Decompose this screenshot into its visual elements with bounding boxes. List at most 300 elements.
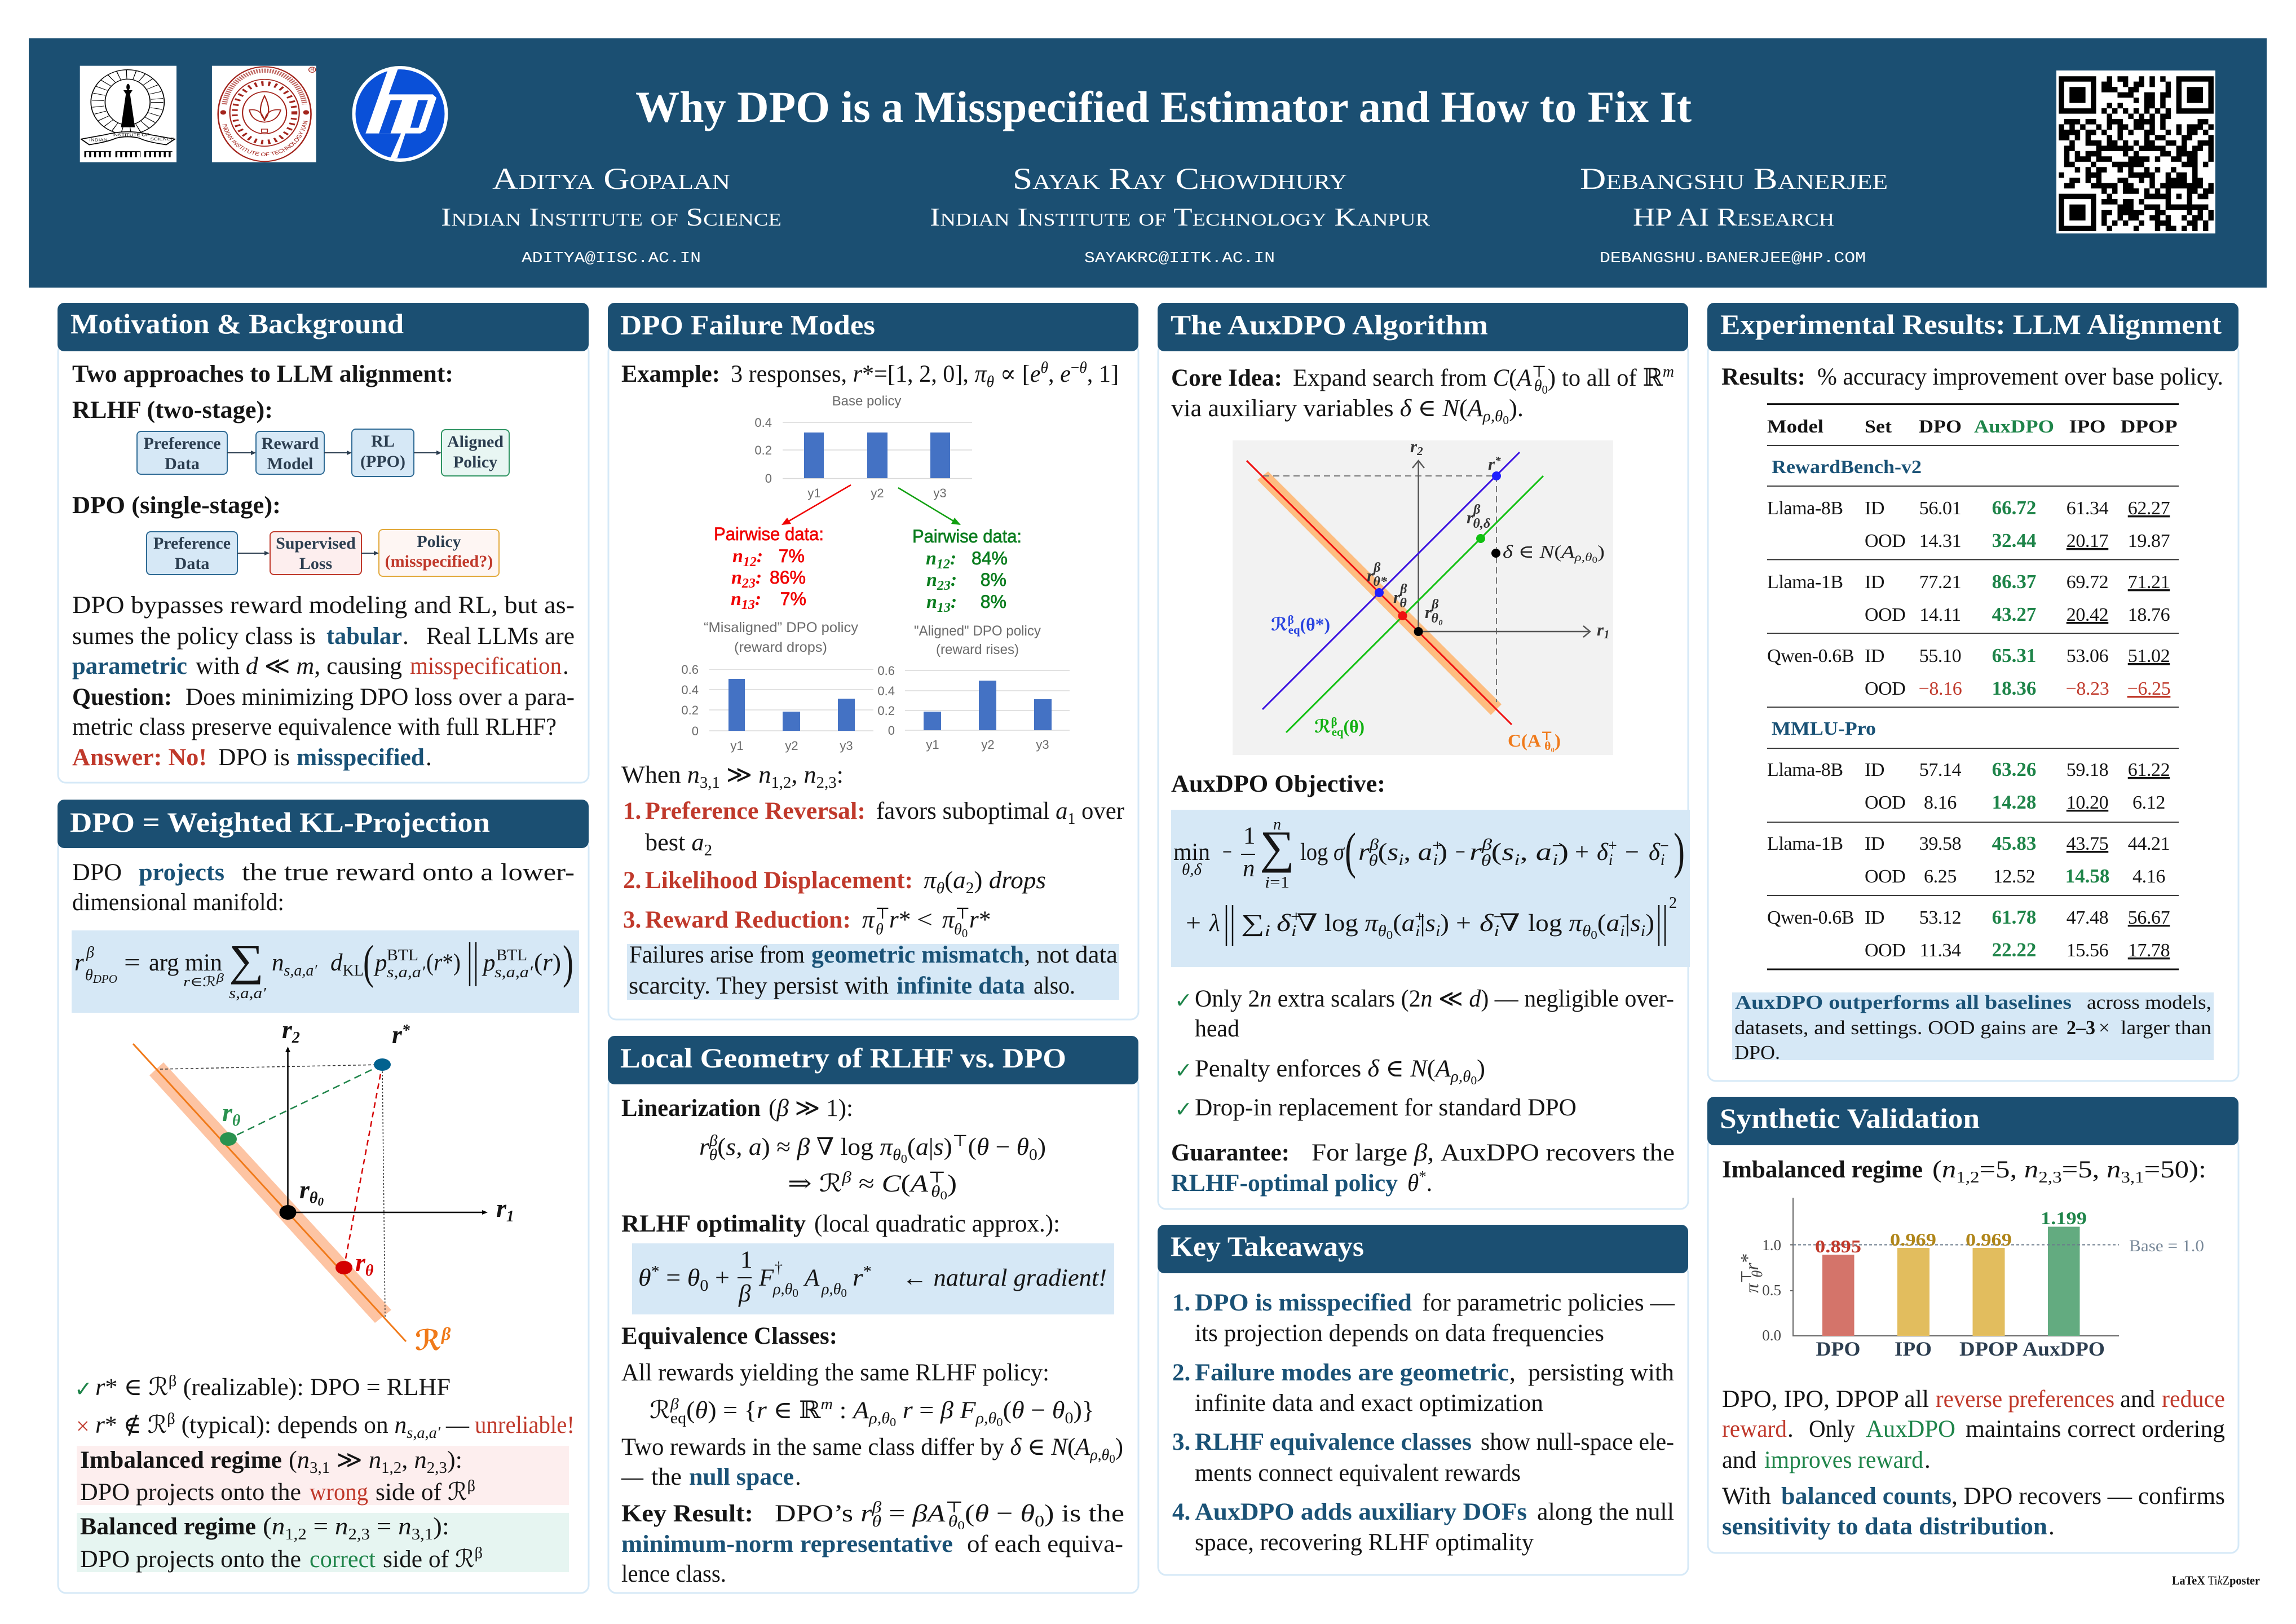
table: LLM alignment results: 14.28	[1992, 791, 2036, 813]
formula: AuxDPO objective: min	[1173, 839, 1210, 866]
failure modes list: drops	[988, 867, 1043, 894]
bar chart: reward by method: AuxDPO	[2023, 1338, 2105, 1360]
synthetic validation text: balanced counts	[1781, 1483, 1951, 1510]
flow diagram: DPO pipeline	[147, 529, 499, 576]
formula: AuxDPO objective	[1171, 810, 1690, 967]
formula: natural gradient	[632, 1243, 1114, 1314]
linearization: ⊤	[928, 1169, 946, 1186]
key result: 0	[957, 1519, 965, 1532]
logo: Indian Institute of Science	[80, 66, 176, 162]
chart: aligned DPO policy: 0	[888, 723, 895, 738]
takeaway 3	[1172, 1429, 1674, 1486]
callout: imbalanced regime	[77, 1446, 569, 1506]
equivalence classes: 0	[996, 1415, 1003, 1429]
panel: DPO Failure Modes	[608, 303, 1138, 1020]
author block: Debangshu Banerjee: Debangshu Banerjee	[1580, 162, 1888, 196]
table: LLM alignment results: 62.27	[2128, 498, 2170, 519]
checklist: realizable vs typical: (realizable): DPO = RLHF	[176, 1374, 451, 1401]
core idea: Expand search from C(A	[1293, 365, 1532, 391]
callout: balanced regime: =	[307, 1513, 335, 1540]
diagram: KL projection geometry: r	[282, 1015, 292, 1044]
bar chart: reward by method	[1737, 1198, 2204, 1360]
bar chart: reward by method: ⊤	[1738, 1270, 1755, 1283]
diagram: AuxDPO geometry: ⊤	[1541, 729, 1553, 743]
takeaway 2: Failure modes are geometric	[1195, 1360, 1509, 1386]
intro text: the true reward onto a lower-	[242, 859, 575, 886]
takeaway 1: 1.	[1172, 1290, 1190, 1316]
formula: AuxDPO objective: )	[1645, 910, 1654, 937]
formula: DPO as KL projection: β	[215, 971, 224, 985]
formula: AuxDPO objective: i=1	[1265, 874, 1290, 892]
aligned pairwise data: 12	[937, 557, 950, 572]
key result: DPO’s r	[775, 1501, 870, 1527]
aligned pairwise data: :	[951, 592, 957, 612]
formula: DPO as KL projection: s,a,a′	[229, 985, 267, 1001]
formula: AuxDPO objective: (	[1597, 910, 1606, 937]
linearization: (	[717, 1134, 726, 1160]
chart: misaligned DPO policy: (reward drops)	[734, 639, 827, 655]
misaligned pairwise data: 86%	[770, 567, 806, 588]
checklist: realizable vs typical: (typical): depends on	[175, 1412, 395, 1438]
author block: Debangshu Banerjee: DEBANGSHU.BANERJEE@HP.COM	[1600, 250, 1866, 267]
panel: Motivation & Background	[58, 303, 589, 783]
formula: DPO as KL projection: p	[482, 950, 495, 976]
misaligned pairwise data: 7%	[779, 546, 805, 566]
misaligned pairwise data: :	[755, 589, 761, 610]
flow diagram: RLHF pipeline: (PPO)	[360, 452, 405, 471]
key result: (	[965, 1501, 974, 1527]
formula: AuxDPO objective: i	[1620, 923, 1625, 940]
flow diagram: DPO pipeline: Policy	[417, 532, 461, 551]
heading: Motivation & Background: Motivation & Background	[70, 308, 404, 339]
takeaway 1: DPO is misspecified	[1195, 1290, 1412, 1316]
synthetic validation text: .	[1787, 1416, 1794, 1442]
equivalence classes: ρ,θ	[868, 1410, 890, 1427]
table: LLM alignment results: OOD	[1865, 604, 1905, 625]
equivalence classes: —	[621, 1464, 644, 1490]
imbalanced regime caption: 2,3	[2038, 1169, 2062, 1186]
key result: minimum-norm representative	[621, 1531, 953, 1557]
checklist: realizable vs typical: r* ∉ ℛ	[95, 1412, 166, 1438]
diagram: AuxDPO geometry: θ,δ	[1473, 517, 1490, 531]
formula: AuxDPO objective: 1	[1243, 823, 1255, 849]
arrow: to misaligned	[781, 485, 851, 525]
arrow: to aligned	[898, 488, 961, 525]
diagram: KL projection geometry: 2	[292, 1029, 300, 1047]
logo: Indian Institute of Science: INSTITUTE OF	[112, 133, 149, 137]
checklist: realizable vs typical: β	[167, 1410, 175, 1428]
key result: Key Result:	[621, 1501, 753, 1527]
formula: AuxDPO objective: θ	[1582, 923, 1591, 940]
misaligned pairwise data: 7%	[780, 589, 806, 609]
table: LLM alignment results: DPOP	[2120, 417, 2178, 437]
takeaway 2	[1172, 1360, 1674, 1416]
callout: imbalanced regime: 1,2	[381, 1459, 401, 1477]
formula: DPO as KL projection: s,a,a′	[494, 964, 533, 981]
imbalanced regime caption	[1722, 1157, 2206, 1186]
RLHF optimality note: (local quadratic approx.):	[814, 1211, 1060, 1237]
takeaway 4: space, recovering RLHF optimality	[1195, 1529, 1534, 1556]
paragraph: DPO bypasses reward modeling	[72, 592, 575, 771]
chart: misaligned DPO policy: “Misaligned” DPO policy	[704, 620, 859, 636]
takeaway 2: ,	[1509, 1360, 1516, 1386]
table: LLM alignment results: 15.56	[2067, 940, 2108, 961]
formula: AuxDPO objective: (	[1345, 823, 1356, 879]
table: LLM alignment results: 56.01	[1919, 498, 1961, 519]
condition text: n	[804, 762, 816, 788]
formula: DPO as KL projection: r	[74, 950, 84, 976]
chart: misaligned DPO policy: 0.2	[681, 703, 699, 717]
equivalence classes: )}	[1073, 1397, 1094, 1424]
table: LLM alignment results: IPO	[2069, 417, 2105, 437]
flow diagram: RLHF pipeline: Data	[165, 454, 200, 473]
synthetic validation text: improves reward	[1764, 1447, 1923, 1473]
table: LLM alignment results: 57.14	[1919, 760, 1962, 780]
example statement: e	[1030, 361, 1040, 387]
linearization: β	[709, 1132, 718, 1150]
imbalanced regime caption: n	[2024, 1157, 2038, 1183]
chart: aligned DPO policy: 0.6	[877, 664, 895, 678]
diagram: AuxDPO geometry: ℛ	[1314, 716, 1331, 736]
linearization: C(A	[882, 1171, 925, 1197]
example statement: Example:	[621, 361, 720, 387]
formula: DPO as KL projection	[72, 930, 579, 1013]
diagram: AuxDPO geometry: eq	[1288, 623, 1300, 637]
takeaway 2: 2.	[1172, 1360, 1190, 1386]
chart: base policy: 0.4	[754, 416, 772, 430]
table: LLM alignment results: ID	[1865, 907, 1884, 928]
failure modes list: over	[1075, 798, 1124, 824]
linearization: Linearization	[621, 1095, 761, 1122]
paragraph: DPO bypasses reward modeling: tabular	[326, 623, 402, 650]
table: LLM alignment results: 53.06	[2067, 646, 2108, 667]
core idea: ⊤	[1532, 363, 1547, 381]
diagram: AuxDPO geometry: *	[1495, 454, 1501, 467]
table: LLM alignment results: 61.78	[1992, 906, 2036, 928]
diagram: AuxDPO geometry: (θ*)	[1300, 614, 1330, 634]
table: LLM alignment results: Set	[1865, 417, 1892, 437]
logo: HP	[352, 66, 448, 162]
paragraph: DPO bypasses reward modeling: DPO bypasses reward modeling and RL, but as-	[72, 592, 575, 619]
formula: DPO as KL projection: p	[373, 950, 387, 976]
table: LLM alignment results: 56.67	[2128, 907, 2170, 928]
formula: natural gradient: *	[651, 1263, 660, 1281]
failure modes list: best a	[645, 829, 704, 856]
equivalence classes: Two rewards in the same class differ by δ ∈ N(A	[621, 1434, 1090, 1460]
linearization: a|s)	[916, 1134, 952, 1160]
equivalence classes: (	[686, 1397, 695, 1424]
formula: natural gradient: r	[853, 1265, 863, 1291]
aligned pairwise data: 84%	[972, 548, 1008, 568]
diagram: KL projection geometry: 1	[506, 1208, 514, 1225]
table: LLM alignment results: ID	[1865, 760, 1884, 780]
diagram: AuxDPO geometry: (θ)	[1343, 716, 1365, 736]
failure modes list: 2	[704, 842, 712, 859]
diagram: AuxDPO geometry: β	[1331, 715, 1337, 729]
paragraph: DPO bypasses reward modeling: misspecified	[297, 744, 425, 771]
diagram: AuxDPO geometry: r	[1410, 436, 1417, 456]
formula: AuxDPO objective: δ	[1649, 839, 1661, 866]
table: LLM alignment results: 71.21	[2128, 572, 2170, 593]
formula: natural gradient: 0	[792, 1286, 798, 1300]
heading: The AuxDPO Algorithm	[1171, 309, 1488, 341]
callout: balanced regime: 3,1	[412, 1526, 433, 1543]
linearization: ⊤	[952, 1132, 968, 1150]
callout: imbalanced regime: ):	[447, 1447, 462, 1473]
equivalence classes: 0	[1065, 1410, 1073, 1427]
key result: θ − θ	[974, 1501, 1032, 1527]
callout: balanced regime	[77, 1513, 569, 1573]
author block: Sayak Ray Chowdhury	[930, 162, 1430, 267]
example statement: ∝ [	[994, 361, 1030, 387]
formula: AuxDPO objective: s	[1502, 839, 1514, 866]
table: LLM alignment results: OOD	[1865, 866, 1905, 887]
linearization: r	[699, 1134, 709, 1160]
imbalanced regime caption: 3,1	[2121, 1169, 2144, 1186]
table: LLM alignment results: 63.26	[1992, 758, 2036, 780]
imbalanced regime caption: n	[2107, 1157, 2121, 1183]
synthetic validation text	[1722, 1386, 2225, 1540]
panel: Key Takeaways	[1158, 1225, 1688, 1575]
failure modes list: π	[924, 867, 936, 894]
formula: AuxDPO objective: −	[1494, 908, 1504, 926]
example statement: 3 responses, r*=[1, 2, 0], π	[731, 361, 987, 387]
table: LLM alignment results: OOD	[1865, 678, 1905, 699]
formula: AuxDPO objective: ,	[1520, 839, 1536, 866]
formula: AuxDPO objective: i	[1436, 923, 1440, 940]
misaligned pairwise data: :	[756, 567, 762, 588]
equivalence classes: β	[670, 1396, 679, 1413]
synthetic validation text: reduce	[2162, 1386, 2225, 1413]
table: LLM alignment results: ID	[1865, 646, 1884, 667]
flow diagram: DPO pipeline: Supervised	[276, 534, 356, 553]
guarantee: Guarantee:	[1171, 1140, 1290, 1166]
callout: AuxDPO outperforms: ×	[2099, 1017, 2110, 1039]
callout: AuxDPO outperforms: AuxDPO outperforms all baselines	[1735, 991, 2072, 1013]
callout: imbalanced regime: β	[467, 1477, 475, 1495]
callout: imbalanced regime: n	[414, 1447, 427, 1473]
bar chart: reward by method: DPOP	[1959, 1338, 2018, 1360]
formula: DPO as KL projection: s,a,a′	[284, 962, 317, 979]
synthetic validation text: , DPO recovers — confirms	[1951, 1483, 2225, 1510]
failure modes list: r	[889, 907, 899, 933]
chart: aligned DPO policy: y3	[1036, 738, 1049, 752]
diagram: KL projection geometry: r	[299, 1175, 310, 1204]
author block: Aditya Gopalan	[441, 162, 781, 267]
guarantee: θ	[1407, 1170, 1419, 1197]
chart: aligned DPO policy: 0.4	[877, 684, 895, 698]
core idea: ) to all of ℝ	[1548, 365, 1663, 391]
benefits checklist: head	[1195, 1016, 1239, 1042]
table: LLM alignment results: DPO	[1919, 417, 1962, 437]
equivalence classes: :	[833, 1397, 853, 1424]
key result: θ	[948, 1513, 958, 1530]
paragraph: DPO bypasses reward modeling: .	[426, 744, 432, 771]
benefits checklist: ✓	[1175, 988, 1193, 1013]
panel: The AuxDPO Algorithm	[1158, 303, 1690, 1209]
linearization: ⇒ ℛ	[788, 1171, 833, 1197]
formula: AuxDPO objective: −	[1625, 839, 1639, 866]
equivalence classes: (	[1003, 1397, 1012, 1424]
takeaway 3: RLHF equivalence classes	[1195, 1429, 1472, 1455]
callout: geometric mismatch: geometric mismatch	[811, 942, 1024, 968]
benefits checklist: ρ,θ	[1450, 1068, 1471, 1085]
checklist: realizable vs typical	[74, 1373, 575, 1442]
failure modes list: Preference Reversal:	[645, 798, 866, 824]
callout: imbalanced regime: Imbalanced regime	[80, 1447, 282, 1473]
failure modes list: *	[899, 907, 911, 933]
linearization: (	[907, 1134, 916, 1160]
bar chart: reward by method: r	[1742, 1263, 1763, 1270]
core idea: m	[1663, 363, 1674, 381]
takeaway 3: ments connect equivalent rewards	[1195, 1460, 1521, 1486]
table: LLM alignment results: −6.25	[2127, 678, 2170, 699]
formula: AuxDPO objective: s	[1388, 839, 1398, 866]
table: LLM alignment results: ID	[1865, 498, 1884, 519]
chart: misaligned DPO policy: 0	[692, 724, 699, 738]
linearization: 0	[901, 1152, 907, 1166]
failure modes list: θ	[937, 880, 944, 897]
callout: imbalanced regime: ,	[401, 1447, 414, 1473]
imbalanced regime caption: (n	[1932, 1157, 1954, 1183]
formula: AuxDPO objective: )	[1440, 910, 1449, 937]
formula: natural gradient: β	[738, 1281, 751, 1307]
formula: AuxDPO objective: −	[1222, 839, 1232, 866]
table: LLM alignment results: 43.75	[2067, 833, 2108, 854]
formula: AuxDPO objective: +	[1415, 908, 1424, 926]
example statement: ,	[1048, 361, 1060, 387]
failure modes list: 2.	[623, 867, 641, 894]
author block: Sayak Ray Chowdhury: SAYAKRC@IITK.AC.IN	[1084, 250, 1275, 267]
callout: imbalanced regime: DPO projects onto the	[80, 1479, 301, 1506]
aligned pairwise data: n	[926, 592, 937, 612]
formula: AuxDPO objective: δ	[1277, 910, 1291, 937]
failure modes list: *	[979, 907, 991, 933]
paragraph: DPO bypasses reward modeling: misspecification	[410, 653, 562, 679]
synthetic validation text: Only	[1809, 1416, 1855, 1442]
panel: Local Geometry of RLHF vs. DPO	[608, 1036, 1138, 1593]
panel: Synthetic Validation	[1707, 1097, 2238, 1553]
equivalence classes: θ) = {r ∈ ℝ	[695, 1397, 817, 1424]
benefits checklist: )	[1477, 1056, 1485, 1082]
table: LLM alignment results: 22.22	[1992, 939, 2036, 961]
chart: base policy: y3	[933, 486, 947, 500]
imbalanced regime caption: =50):	[2144, 1157, 2206, 1183]
table: LLM alignment results: MMLU-Pro	[1772, 718, 1876, 739]
formula: AuxDPO objective: −	[1552, 837, 1564, 855]
synthetic validation text: AuxDPO	[1866, 1416, 1955, 1442]
formula: DPO as KL projection: s,a,a′	[387, 964, 426, 981]
QR code	[2056, 70, 2215, 233]
synthetic validation text: .	[1924, 1447, 1931, 1473]
formula: natural gradient: θ	[638, 1265, 651, 1291]
key result: of each equiva-	[967, 1531, 1123, 1557]
synthetic validation text: With	[1722, 1483, 1771, 1510]
equivalence classes: null space	[689, 1464, 794, 1490]
synthetic validation text: and	[1722, 1447, 1756, 1473]
formula: DPO as KL projection: DPO	[92, 972, 117, 986]
takeaway 2: infinite data and exact optimization	[1195, 1390, 1543, 1416]
table: LLM alignment results: AuxDPO	[1974, 417, 2054, 437]
callout: balanced regime: n	[398, 1513, 412, 1540]
failure modes list: favors suboptimal a	[876, 798, 1068, 824]
key result: ⊤	[945, 1499, 963, 1516]
formula: AuxDPO objective: )	[1674, 823, 1685, 879]
author block: Debangshu Banerjee: HP AI Research	[1633, 202, 1834, 231]
linearization: θ − θ	[977, 1134, 1028, 1160]
callout: balanced regime: =	[370, 1513, 398, 1540]
callout: balanced regime: β	[475, 1544, 483, 1562]
callout: balanced regime: ):	[433, 1513, 449, 1540]
diagram: AuxDPO geometry: 0	[1592, 555, 1597, 565]
bar chart: reward by method: IPO	[1895, 1338, 1932, 1360]
misaligned pairwise data: n	[732, 546, 743, 567]
chart: base policy: y2	[871, 486, 884, 500]
imbalanced regime caption: =5,	[1980, 1157, 2024, 1183]
equivalence classes: the	[651, 1464, 682, 1490]
formula: natural gradient: ← natural gradient!	[902, 1265, 1107, 1291]
chart: misaligned DPO policy: 0.4	[681, 683, 699, 697]
formula: AuxDPO objective: s	[1630, 910, 1641, 937]
takeaway 3: 3.	[1172, 1429, 1190, 1455]
heading: DPO Failure Modes	[620, 309, 875, 341]
equivalence classes: All rewards yielding the same RLHF policy:	[621, 1360, 1049, 1386]
formula: AuxDPO objective: ∑	[1260, 822, 1295, 873]
table: LLM alignment results: 18.36	[1992, 677, 2036, 699]
linearization: θ	[893, 1146, 901, 1164]
failure modes list	[623, 798, 1124, 940]
formula: DPO as KL projection: θ	[85, 967, 93, 984]
equivalence classes: r	[896, 1397, 913, 1424]
callout: geometric mismatch: , not data	[1024, 942, 1118, 968]
formula: AuxDPO objective: δ	[1597, 839, 1609, 866]
table: LLM alignment results: 14.58	[2065, 865, 2109, 887]
aligned pairwise data: 8%	[981, 570, 1006, 590]
intro text: dimensional manifold:	[72, 889, 284, 916]
diagram: KL projection geometry: r	[355, 1248, 365, 1277]
equivalence classes: = β F	[919, 1397, 973, 1424]
aligned pairwise data: 23	[937, 579, 951, 593]
formula: DPO as KL projection: KL	[343, 962, 364, 979]
diagram: AuxDPO geometry: ρ,θ	[1574, 550, 1592, 564]
author block: Aditya Gopalan: Aditya Gopalan	[492, 162, 730, 196]
table: LLM alignment results: Llama-8B	[1767, 760, 1843, 780]
flow diagram: RLHF pipeline: Reward	[262, 434, 319, 453]
formula: DPO as KL projection: n	[272, 950, 284, 976]
linearization	[621, 1095, 1046, 1202]
table: LLM alignment results: −8.16	[1919, 678, 1962, 699]
aligned pairwise data: 13	[937, 601, 951, 615]
chart: aligned DPO policy: 0.2	[877, 704, 895, 718]
bar chart: reward by method: *	[1737, 1253, 1758, 1263]
author block: Aditya Gopalan: ADITYA@IISC.AC.IN	[522, 250, 701, 267]
callout: geometric mismatch: infinite data	[897, 973, 1025, 999]
panel: DPO = Weighted KL-Projection	[58, 800, 589, 1593]
linearization: (	[968, 1134, 977, 1160]
callout: geometric mismatch: Failures arise from	[629, 942, 805, 968]
table: LLM alignment results: −8.23	[2066, 678, 2109, 699]
example statement: θ	[1079, 359, 1087, 377]
formula: AuxDPO objective: i	[1433, 851, 1438, 869]
chart: misaligned DPO policy: y3	[840, 739, 853, 753]
paragraph: DPO bypasses reward modeling: sumes the policy class is	[72, 623, 316, 650]
synthetic validation text: DPO, IPO, DPOP all	[1722, 1386, 1929, 1413]
formula: AuxDPO objective: −	[1455, 839, 1465, 866]
diagram: KL projection geometry: ℛ	[415, 1325, 441, 1356]
table: LLM alignment results: OOD	[1865, 531, 1905, 551]
diagram: KL projection geometry: θ	[232, 1112, 241, 1129]
table: LLM alignment results: 44.21	[2128, 833, 2170, 854]
